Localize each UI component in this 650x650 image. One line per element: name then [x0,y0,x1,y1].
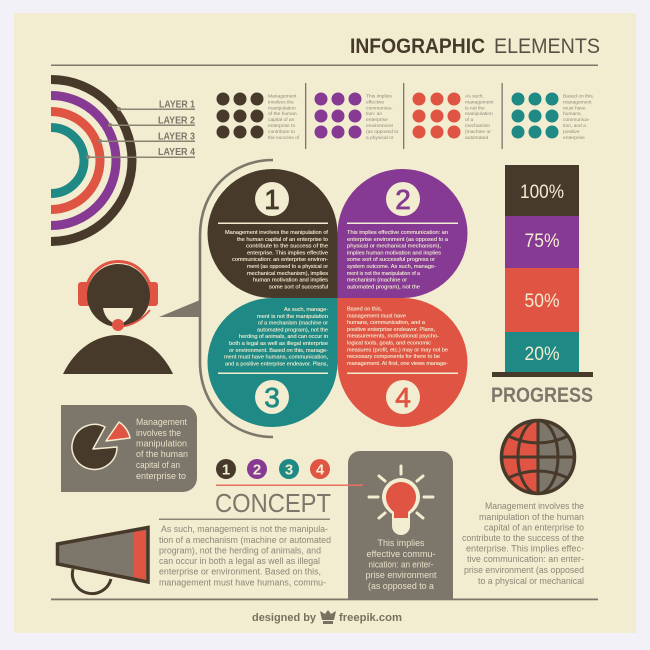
globe paragraph: prise environment (as opposed [464,565,584,575]
globe paragraph [462,501,584,586]
dot group 1: contribute to [268,129,295,135]
petal 1: communication: an enterprise environ- [232,257,328,263]
petal 1: contribute to the success of the [246,244,328,250]
globe paragraph: capital of an enterprise to [484,522,584,532]
petal 3: of a mechanism (machine or [258,321,328,327]
concept paragraph: management must have humans, commu- [159,577,326,587]
dot group 2: tion: an [366,111,382,117]
dot group 3: (machine or [465,129,491,135]
dot group 3: mechanism [465,123,490,129]
layer labels: LAYER 2 [158,114,195,126]
petal 2 [338,169,467,298]
dot group 3: of a [465,117,473,123]
dot group 1: involves the [268,99,294,105]
dot group 3: manipulation [465,111,493,117]
petal 2: 2 [395,184,411,215]
petal 4: positive enterprise endeavor. Plans, [347,327,435,333]
dot group 1: of the human [268,111,297,117]
petal 2: physical or mechanical mechanism), [347,244,441,250]
dot group 4: enterprise [563,135,585,141]
person with headset icon [63,262,173,374]
petal 2: enterprise environment (as opposed to a [347,237,449,243]
globe paragraph: to a physical or mechanical [478,576,584,586]
dot group 4: Based on this, [563,94,594,100]
dot group 2: effective [366,99,384,105]
layer labels: LAYER 4 [158,146,195,158]
concept number badges: 1 [222,462,230,478]
progress stacked bar: 100% [520,182,564,203]
note text: involves the [136,428,181,438]
petal 1: the human capital of an enterprise to [237,237,328,243]
petal 1: Management involves the manipulation of [225,230,328,236]
petal 3: herding of animals, and can occur in [239,334,328,340]
dot group 1: manipulation [268,105,296,111]
dot group 1: enterprise to [268,123,295,129]
title: ELEMENTS [494,35,600,58]
progress stacked bar: 20% [524,344,560,365]
progress stacked bar [492,165,593,377]
petal 3: or environment. Based on this, manage- [229,348,328,354]
bulb text: (as opposed to a [368,581,434,591]
panel: pie chart note [61,405,197,492]
globe paragraph: contribute to the success of the [462,533,584,543]
icon: lightbulb [369,466,433,535]
icon: pie chart [72,422,130,469]
petal 2: implies human motivation and implies [347,250,441,256]
petal 2: system outcome. As such, manage- [347,264,436,270]
concept heading: CONCEPT [215,488,331,518]
footer credit [252,610,402,624]
panel: lightbulb note [216,451,453,599]
speech bubble outline [159,160,273,437]
note text [136,417,188,481]
title [350,35,600,58]
concept paragraph: can occur in both a legal as well as illegal [159,556,320,566]
dot group 2: (as opposed to [366,129,399,135]
dot group 4: positive [563,129,580,135]
petal 3: ment is not the manipulation [257,314,328,320]
petal 1: ment (as opposed to a physical or [247,264,328,270]
petal 4: measurements, motivational psycho- [347,334,439,340]
icon: megaphone [58,528,148,594]
footer credit: designed by [252,612,317,624]
petal 4 [338,298,467,427]
concept paragraph [159,524,331,587]
dot group 3: management [465,99,494,105]
petal 1: human motivation and implies [253,278,328,284]
concept paragraph: As such, management is not the manipula- [161,524,328,534]
petal 3 [207,298,338,427]
petal 3: 3 [264,382,280,413]
dot group 3 [412,92,494,141]
concept paragraph: program), not the herding of animals, and [159,545,321,555]
petal 2: This implies effective communication: an [347,230,448,236]
footer credit: freepik.com [339,612,402,624]
petal 4: measures (profit, etc.) may or may not be [347,347,448,353]
bulb text: This implies [378,538,425,548]
icon: globe [501,420,575,494]
dot group 3: As such, [465,94,484,100]
petal 2: mechanism (machine or [347,278,407,284]
layer labels [86,98,195,159]
petal 2: ment is not the manipulation of a [347,271,421,277]
progress stacked bar: 75% [524,231,560,252]
semicircle layer rings [51,80,132,242]
dot group 4: humans, [563,111,582,117]
dot group 1 [216,92,300,141]
note text: Management [136,417,188,427]
note text: of the human [136,449,188,459]
petal 4: necessary components for there to be [347,354,440,360]
dot group 2: communica- [366,105,393,111]
dot group 4 [512,92,594,141]
dot group 4: management [563,99,592,105]
dot group 2 [314,92,399,141]
petal 4: logical tools, goals, and economic [347,340,431,346]
concept number badges [216,459,330,479]
dot group 2: enterprise [366,117,388,123]
petal 4: 4 [395,382,411,413]
petal 3: As such, manage- [284,307,328,313]
layer labels: LAYER 1 [159,98,195,110]
petal 1: mechanical mechanism), implies [247,271,328,277]
dot group 3: is not the [465,105,485,111]
bulb text: prise environment [366,570,437,580]
note text: enterprise to [136,471,186,481]
petal 4: management. At first, one views manage- [347,361,448,367]
petal 1: 1 [264,184,280,215]
progress label: PROGRESS [491,384,593,407]
note text: manipulation [136,438,187,448]
dot group 2: This implies [366,94,392,100]
petal 3: and a positive enterprise endeavor. Plans, [225,361,328,367]
petal 3: both a legal as well as illegal enterprise [229,341,328,347]
bulb text [366,538,437,591]
dot group 1: Management [268,94,297,100]
dot group 3: automated [465,135,488,141]
globe paragraph: manipulation of the human [479,512,584,522]
bulb text: nication: an enter- [368,560,434,570]
petal 3: ment must have humans, communication, [224,355,328,361]
concept number badges: 3 [285,462,293,478]
dot group 2: environment [366,123,394,129]
petal 2: automated program), not the [347,284,420,290]
dot group 4: communica- [563,117,590,123]
globe paragraph: Management involves the [485,501,584,511]
layer labels: LAYER 3 [158,130,195,142]
bulb text: effective commu- [366,549,436,559]
concept number badges: 4 [316,462,325,478]
progress stacked bar: 50% [524,291,560,312]
title: INFOGRAPHIC [350,35,485,58]
concept number badges: 2 [253,462,261,478]
globe paragraph: enterprise. This implies effec- [466,544,584,554]
concept paragraph: enterprise or environment. Based on this, [159,567,321,577]
globe paragraph: tive communication: an enter- [467,554,584,564]
petal 4: management must have [347,313,406,319]
dot group 4: must have [563,105,586,111]
dot group 4: tion, and a [563,123,586,129]
petal 2: some sort of successful progress or [347,257,435,263]
petal 4: Based on this, [347,306,382,312]
note text: capital of an [136,460,180,470]
petal 1: enterprise. This implies effective [247,250,328,256]
concept paragraph: tion of a mechanism (machine or automated [159,535,331,545]
petal 1 [207,169,338,298]
petal 4: humans, communication, and a [347,320,426,326]
dot group 1: capital of an [268,117,295,123]
dot group 2: a physical or [366,135,394,141]
petal 1: some sort of successful [269,284,328,290]
dot group 1: the success of [268,135,300,141]
petal 3: automated program), not the [257,327,328,333]
